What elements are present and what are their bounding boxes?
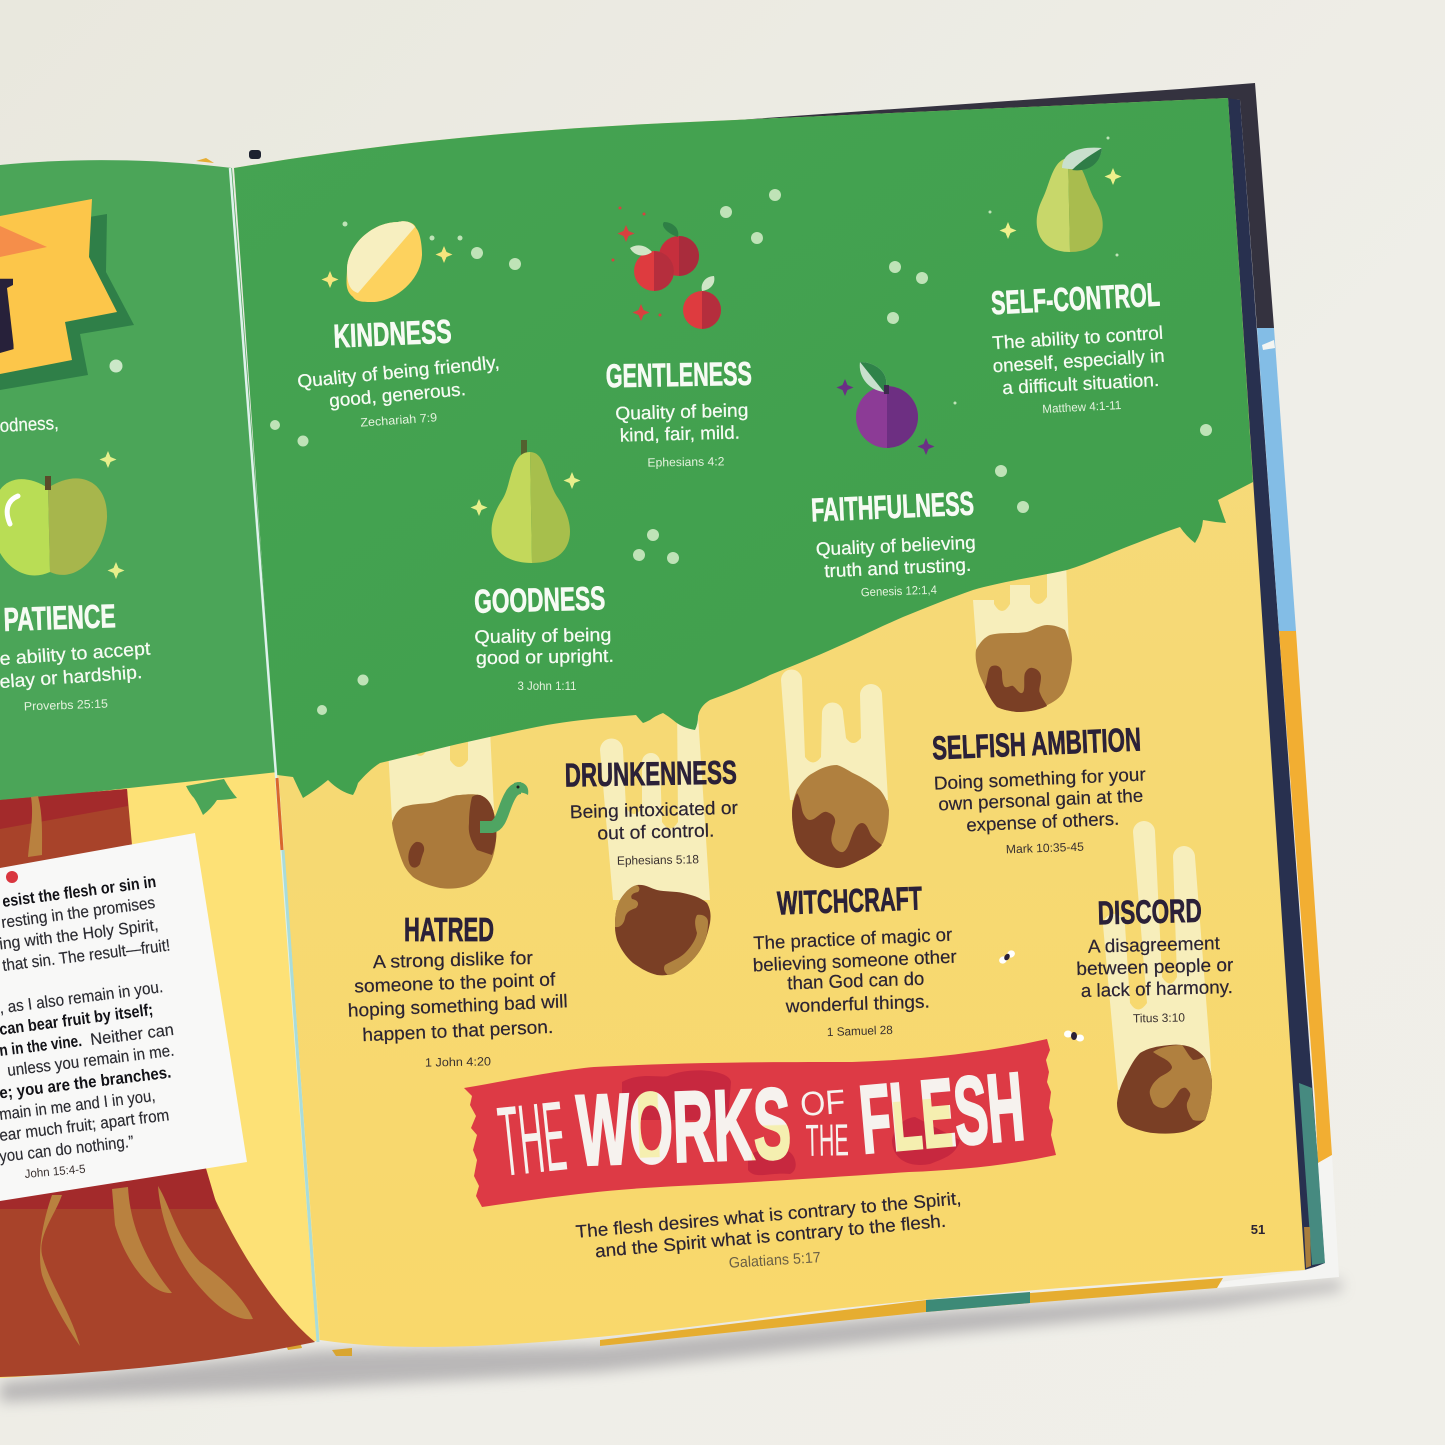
hatred text: hoping something bad will xyxy=(347,990,568,1021)
witchcraft text: The practice of magic or xyxy=(753,924,953,953)
discord tail xyxy=(1103,821,1212,1090)
self-control text: The ability to control xyxy=(992,322,1164,353)
selfish ambition text xyxy=(933,763,1146,856)
ribbon blobs xyxy=(622,1070,960,1175)
faithfulness text: Genesis 12:1,4 xyxy=(861,583,937,599)
faithfulness heading: FAITHFULNESS xyxy=(810,484,975,529)
selfish ambition text: Doing something for your xyxy=(933,763,1146,794)
card text: can bear fruit by itself; xyxy=(0,1001,154,1039)
drunkenness fruit xyxy=(615,885,711,975)
drunkenness text: Ephesians 5:18 xyxy=(617,852,699,868)
page yellow xyxy=(234,98,1305,1347)
banner title text: WORKS xyxy=(575,1068,793,1187)
goodness text xyxy=(474,624,614,693)
patience text xyxy=(0,638,151,713)
icon: bee xyxy=(998,949,1016,965)
witchcraft heading: WITCHCRAFT xyxy=(776,879,923,922)
faithfulness fruit: plum xyxy=(836,362,934,455)
banner caption: The flesh desires what is contrary to the Spirit, xyxy=(575,1188,962,1242)
cover strip: orange xyxy=(1279,631,1332,1163)
card text: main in me and I in you, xyxy=(0,1087,156,1124)
sign orange triangle xyxy=(0,226,47,257)
banner title text: THE xyxy=(494,1080,571,1197)
selfish ambition fruit xyxy=(976,625,1072,712)
witchcraft fruit xyxy=(792,765,889,868)
book shadow xyxy=(0,1280,1342,1402)
cover corner: white xyxy=(1217,1155,1339,1288)
patience heading: PATIENCE xyxy=(3,597,116,638)
witchcraft text: than God can do xyxy=(787,968,925,993)
hatred heading: HATRED xyxy=(404,911,494,948)
card text: you can do nothing.” xyxy=(0,1133,135,1166)
banner title text xyxy=(494,1053,1028,1197)
tree trunk xyxy=(0,789,315,1377)
card text: ing with the Holy Spirit, xyxy=(0,916,159,953)
card text: , as I also remain in you. xyxy=(0,978,164,1017)
faithfulness text xyxy=(815,532,976,599)
hatred tail xyxy=(387,730,494,820)
goodness text: Quality of being xyxy=(474,624,612,647)
gentleness heading: GENTLENESS xyxy=(605,355,752,394)
hatred text xyxy=(347,947,568,1070)
witchcraft text xyxy=(752,924,957,1039)
leaf cluster xyxy=(186,779,237,815)
discord text: a lack of harmony. xyxy=(1081,976,1233,1001)
icon: apple xyxy=(0,451,125,579)
dots xyxy=(270,136,1212,715)
discord text: Titus 3:10 xyxy=(1133,1011,1185,1025)
cover strip: brown xyxy=(1304,1227,1311,1268)
self-control text: a difficult situation. xyxy=(1002,369,1160,398)
selfish ambition text: own personal gain at the xyxy=(938,785,1144,814)
goodness text: 3 John 1:11 xyxy=(518,679,577,693)
bottom page edge colours xyxy=(600,1278,1223,1346)
card text: John 15:4-5 xyxy=(24,1162,86,1181)
card text: unless you remain in me. xyxy=(6,1042,175,1080)
drunkenness heading: DRUNKENNESS xyxy=(564,754,737,793)
hatred text: someone to the point of xyxy=(354,968,556,997)
card text: Neither can xyxy=(89,1021,175,1049)
drunkenness text: Being intoxicated or xyxy=(570,797,738,822)
goodness text: good or upright. xyxy=(476,645,614,668)
left page yellow xyxy=(0,772,320,1378)
right page xyxy=(230,98,1305,1347)
banner caption: Galatians 5:17 xyxy=(728,1249,821,1272)
page green canopy xyxy=(234,98,1253,798)
selfish ambition text: expense of others. xyxy=(966,808,1120,835)
card text: n in the vine. xyxy=(0,1032,83,1060)
self-control text xyxy=(992,322,1165,416)
drunkenness text xyxy=(570,797,738,868)
hatred text: happen to that person. xyxy=(362,1016,554,1045)
witchcraft text: 1 Samuel 28 xyxy=(827,1023,893,1039)
left page xyxy=(0,160,320,1378)
discord fruit xyxy=(1117,1045,1212,1134)
banner caption: and the Spirit what is contrary to the flesh. xyxy=(594,1211,947,1261)
hatred fruit with worm xyxy=(392,782,528,889)
title banner xyxy=(464,1039,1056,1207)
left page green xyxy=(0,160,278,802)
card text: esist the flesh or sin in xyxy=(1,873,157,911)
patience text: Proverbs 25:15 xyxy=(24,697,108,713)
goodness heading: GOODNESS xyxy=(474,579,606,620)
kindness text: good, generous. xyxy=(328,378,467,411)
sign shadow xyxy=(0,214,134,390)
selfish ambition text: Mark 10:35-45 xyxy=(1006,840,1084,856)
dot xyxy=(110,360,122,372)
gutter binding line xyxy=(230,168,318,1342)
card text: resting in the promises xyxy=(0,894,156,932)
drunkenness text: out of control. xyxy=(597,819,715,844)
red dot xyxy=(6,871,18,883)
kindness heading: KINDNESS xyxy=(333,312,452,355)
icon: bee xyxy=(1064,1030,1084,1042)
witchcraft text: wonderful things. xyxy=(784,990,930,1017)
red ribbon xyxy=(464,1039,1056,1207)
white card xyxy=(0,833,247,1201)
discord heading: DISCORD xyxy=(1097,892,1202,931)
kindness text xyxy=(296,351,500,430)
kindness text: Quality of being friendly, xyxy=(296,351,500,392)
hatred text: A strong dislike for xyxy=(373,947,533,972)
selfish ambition tail xyxy=(973,560,1069,655)
discord text: A disagreement xyxy=(1088,932,1220,957)
gentleness text xyxy=(615,399,749,470)
drunkenness tail xyxy=(600,700,710,900)
card text xyxy=(0,873,175,1181)
self-control fruit: pear xyxy=(1000,148,1122,252)
gentleness text: Ephesians 4:2 xyxy=(647,454,725,470)
sign xyxy=(0,199,117,374)
banner caption xyxy=(575,1188,962,1272)
banner title text: OF xyxy=(799,1083,846,1124)
card text: that sin. The result—fruit! xyxy=(1,937,171,975)
kindness text: Zechariah 7:9 xyxy=(360,410,438,430)
self-control text: oneself, especially in xyxy=(992,345,1165,376)
card text: ear much fruit; apart from xyxy=(0,1106,170,1145)
tree roots xyxy=(28,796,253,1346)
card text: e; you are the branches. xyxy=(0,1064,172,1102)
banner title text: FLESH xyxy=(856,1053,1028,1174)
gentleness fruit: cherries xyxy=(612,206,721,329)
cover strip: sky blue xyxy=(1257,328,1296,631)
faithfulness text: truth and trusting. xyxy=(824,554,972,581)
witchcraft text: believing someone other xyxy=(752,946,957,975)
gentleness text: Quality of being xyxy=(615,399,749,424)
selfish ambition heading: SELFISH AMBITION xyxy=(931,720,1142,767)
fragment text: goodness: odness, xyxy=(0,412,59,436)
banner title text: THE xyxy=(805,1114,849,1166)
patience text: elay or hardship. xyxy=(0,661,143,692)
discord text xyxy=(1076,932,1234,1025)
patience text: e ability to accept xyxy=(0,638,151,669)
cover strip: teal xyxy=(1299,1083,1325,1265)
kindness fruit: lemon xyxy=(322,221,452,302)
page number: 51 xyxy=(1251,1222,1265,1237)
witchcraft tail xyxy=(781,670,888,800)
goodness fruit: pear xyxy=(470,440,580,563)
discord text: between people or xyxy=(1076,954,1234,979)
book cover: top edge and right spine xyxy=(196,83,1339,1356)
hatred text: 1 John 4:20 xyxy=(425,1054,491,1070)
gentleness text: kind, fair, mild. xyxy=(620,421,740,446)
self-control heading: SELF-CONTROL xyxy=(990,276,1161,321)
self-control text: Matthew 4:1-11 xyxy=(1042,398,1122,416)
faithfulness text: Quality of believing xyxy=(815,532,976,559)
